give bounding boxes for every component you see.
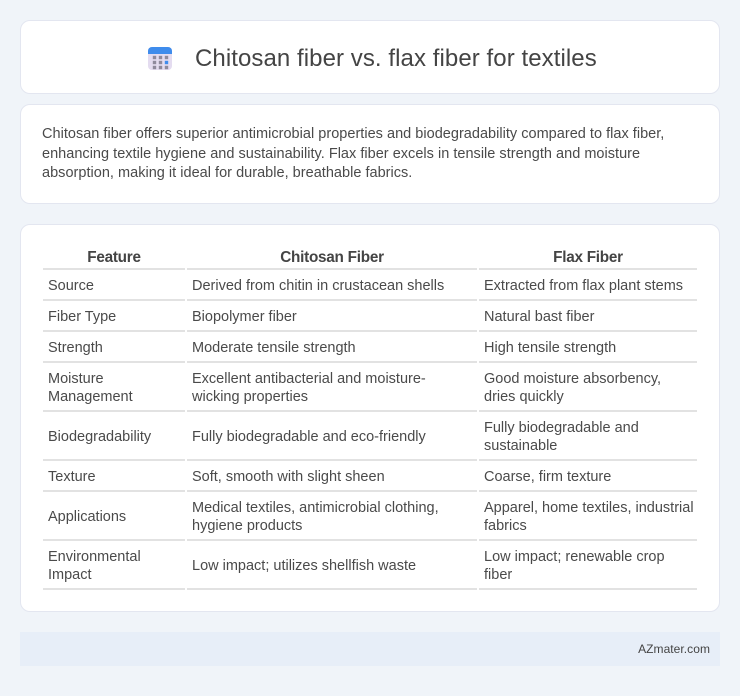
text: Moderate tensile strength	[192, 340, 356, 356]
table header: Feature: Feature	[87, 249, 141, 266]
text: Medical textiles, antimicrobial clothing,	[192, 500, 439, 516]
text: Good moisture absorbency,	[484, 371, 661, 387]
table header: Chitosan Fiber: Chitosan Fiber	[280, 249, 384, 266]
row: Environmental Impact: Impact	[48, 567, 92, 583]
footer text: AZmater.com	[638, 642, 710, 656]
icon: calendar	[148, 47, 172, 70]
text: dries quickly	[484, 389, 564, 405]
text: Low impact; utilizes shellfish waste	[192, 558, 416, 574]
row: Applications: Applications	[48, 509, 126, 525]
text: sustainable	[484, 438, 557, 454]
footer bar	[20, 632, 720, 666]
row: Source: Source	[48, 278, 94, 294]
summary text: absorption, making it ideal for durable, breathable fabrics.	[42, 165, 412, 181]
panel: comparison table	[20, 224, 720, 612]
text: fiber	[484, 567, 512, 583]
row: Environmental Impact: Environmental	[48, 549, 141, 565]
table header: Flax Fiber: Flax Fiber	[553, 249, 623, 266]
text: hygiene products	[192, 518, 302, 534]
text: Low impact; renewable crop	[484, 549, 665, 565]
row: Moisture Management: Moisture	[48, 371, 104, 387]
summary text: Chitosan fiber offers superior antimicrobial properties and biodegradability compared to flax fiber,	[42, 126, 664, 142]
text: Soft, smooth with slight sheen	[192, 469, 385, 485]
panel: title card	[20, 20, 720, 94]
summary text: enhancing textile hygiene and sustainability. Flax fiber excels in tensile strength and moisture	[42, 146, 640, 162]
row: Fiber Type: Fiber Type	[48, 309, 116, 325]
row: Moisture Management: Management	[48, 389, 133, 405]
text: Excellent antibacterial and moisture-	[192, 371, 426, 387]
row: Texture: Texture	[48, 469, 96, 485]
text: wicking properties	[192, 389, 308, 405]
text: Natural bast fiber	[484, 309, 594, 325]
title: Chitosan fiber vs. flax fiber for textiles	[195, 45, 597, 72]
panel: summary	[20, 104, 720, 204]
text: Biopolymer fiber	[192, 309, 297, 325]
text: Fully biodegradable and eco-friendly	[192, 429, 426, 445]
row: Biodegradability: Biodegradability	[48, 429, 151, 445]
text: Coarse, firm texture	[484, 469, 611, 485]
row: Strength: Strength	[48, 340, 103, 356]
text: Fully biodegradable and	[484, 420, 639, 436]
row: Environmental Impact	[48, 549, 141, 583]
summary text	[42, 126, 664, 181]
text: Extracted from flax plant stems	[484, 278, 683, 294]
text: Apparel, home textiles, industrial	[484, 500, 694, 516]
text: High tensile strength	[484, 340, 616, 356]
text: Derived from chitin in crustacean shells	[192, 278, 444, 294]
row: Moisture Management	[48, 371, 133, 405]
text: fabrics	[484, 518, 527, 534]
